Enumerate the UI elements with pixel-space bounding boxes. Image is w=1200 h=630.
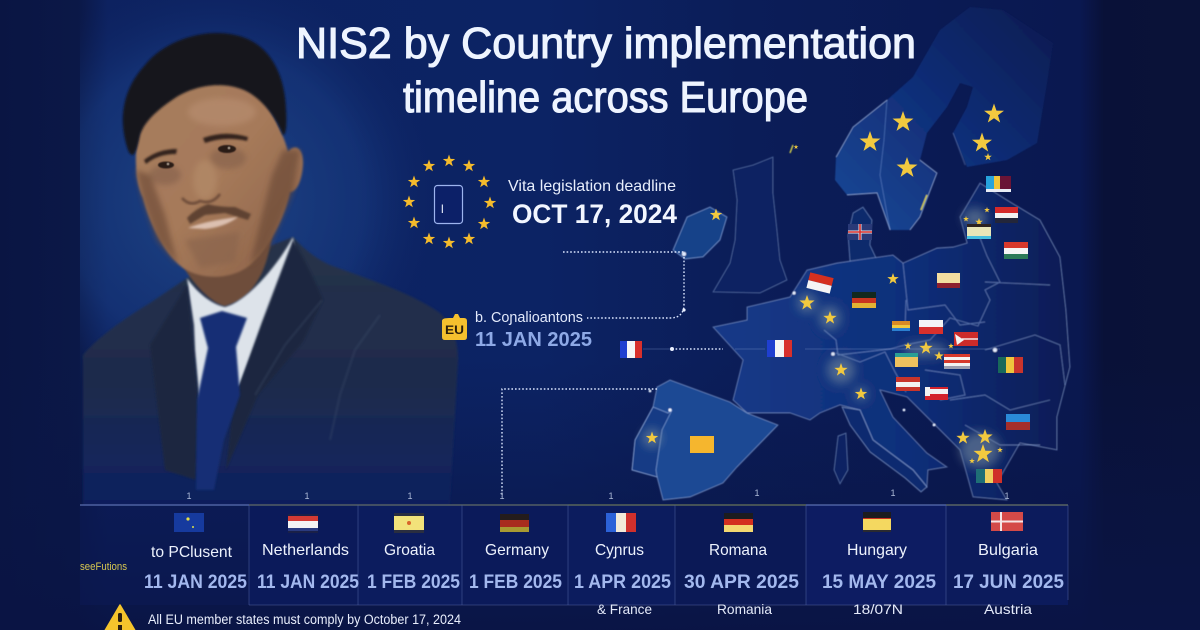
portrait: suit [83,237,458,505]
timeline country names: to PClusent [151,544,233,561]
EU badge icon: EU [445,325,464,337]
map: mainland [713,183,1070,500]
timeline country names: Groatia [384,542,435,559]
title: timeline across Europe [403,73,808,122]
January callout: b. Coɲalioantons [475,309,583,326]
map: Denmark [848,207,878,262]
flag: Latvia area [967,224,991,239]
map: glowing regions [642,208,1000,468]
portrait: jacket highlights [255,300,380,440]
map: city lights [649,252,997,426]
flag: EU [174,513,204,532]
map: Great Britain [713,157,787,293]
timeline tick marks: 1 [1004,491,1010,501]
portrait: shirt [187,237,296,405]
deadline callout: OCT 17, 2024 [512,199,677,229]
timeline country names: Hungary [847,542,907,559]
flag: blue over red [1006,414,1030,430]
flag: Estonia area [995,207,1018,223]
EU star ring with device icon [403,154,496,248]
flag: Spain block [690,436,714,453]
timeline tick marks: 1 [890,488,896,498]
EU badge icon [442,314,467,340]
map: Sardinia [834,433,848,484]
map: Ireland [673,207,727,259]
map: Italy [842,407,927,492]
timeline tick marks: 1 [407,491,413,501]
map: Iberia [632,380,778,500]
map of Europe [632,7,1070,500]
timeline dates: 15 MAY 2025 [822,572,936,593]
timeline flags [174,512,1023,533]
portrait: neck [178,235,272,306]
timeline country names: Germany [485,542,549,559]
timeline sub labels: & France [597,601,652,617]
flag: Germany [500,514,529,532]
flag: France on map [767,340,792,357]
timeline dates: 1 APR 2025 [574,572,671,593]
timeline tick marks: 1 [608,491,614,501]
portrait: facial shading [136,98,300,268]
portrait: tie [196,311,247,490]
flag: red banner [954,332,978,346]
dotted connectors [502,252,723,497]
timeline tick marks: 1 [499,491,505,501]
flag: yellow gradient [895,353,918,367]
EU star ring with device icon: l [441,202,444,216]
timeline tick marks [186,488,1010,501]
timeline tick marks: 1 [754,488,760,498]
timeline sub labels: Romania [717,601,772,617]
flag: Hungary [1004,242,1028,259]
portrait: lapels [150,240,323,480]
flag: Cyprus [606,513,636,532]
map: Baltic islands [790,145,927,210]
map: Scandinavia [835,7,1053,230]
timeline country names [151,542,1038,561]
timeline country names: Cyɲrus [595,542,644,559]
timeline tick marks: 1 [304,491,310,501]
timeline country names: Netherlands [262,542,349,559]
portrait: eyebrows [144,134,248,164]
flag: France at sea [620,341,642,358]
timeline dates: 17 JUN 2025 [953,572,1064,593]
deadline callout: Vita legislation deadline [508,178,676,195]
timeline country names: Bulgaria [978,542,1038,559]
flag: Croatia area [896,377,920,391]
portrait: nose [182,194,220,203]
flag: green yellow blue [892,321,910,331]
map: Portugal [632,407,672,477]
flag: Bulgaria [991,512,1023,531]
timeline dates: 1 FEB 2025 [469,572,562,593]
flag: Romania [998,357,1023,373]
flag: Hungary [863,512,891,532]
timeline sub labels [597,601,1032,617]
map stars [646,104,1004,463]
flag: Bulgaria area [976,469,1002,483]
portrait: mouth [188,217,238,229]
January callout: 11 JAN 2025 [475,329,592,351]
timeline dates: 1 FEB 2025 [367,572,460,593]
flag: Netherlands [288,514,318,533]
portrait: face [136,71,303,277]
timeline dates: 11 JAN 2025 [257,572,359,593]
timeline dates [144,572,1064,593]
map: borders [824,238,1065,445]
connector end points [643,308,1000,351]
timeline sub labels: 18/07N [853,601,903,617]
timeline sub labels: Austria [984,601,1032,617]
timeline tick marks: 1 [186,491,192,501]
warning icon [103,605,137,630]
flag: Poland [919,320,943,334]
January callout [475,309,592,351]
timeline strip [80,505,1068,605]
timeline dates: 11 JAN 2025 [144,572,247,593]
flag: cream and maroon [937,273,960,288]
title: NIS2 by Country implementation [296,19,916,68]
portrait: hair [123,33,286,155]
flag: top Baltic [986,176,1011,192]
flag: Croatia [394,513,424,533]
portrait: eyes [158,145,236,168]
compliance note: All EU member states must comply by October 17, 2024 [148,612,461,627]
title [296,19,916,122]
flag: Netherlands tilted [806,272,834,294]
portrait [83,33,458,505]
timeline dates: 30 APR 2025 [684,572,799,593]
flag: United Kingdom [848,224,872,240]
flag: red white stripes [944,354,970,369]
timeline country names: Romana [709,542,767,559]
timeline: cell backgrounds [80,505,1068,605]
flag: Romana [724,513,753,532]
map flags [620,176,1030,483]
portrait: moustache [187,204,251,224]
flag: Germany [852,292,876,308]
left yellow label: seeFutions [80,561,127,573]
flag: Serbia area [925,387,948,400]
deadline callout [508,178,677,229]
